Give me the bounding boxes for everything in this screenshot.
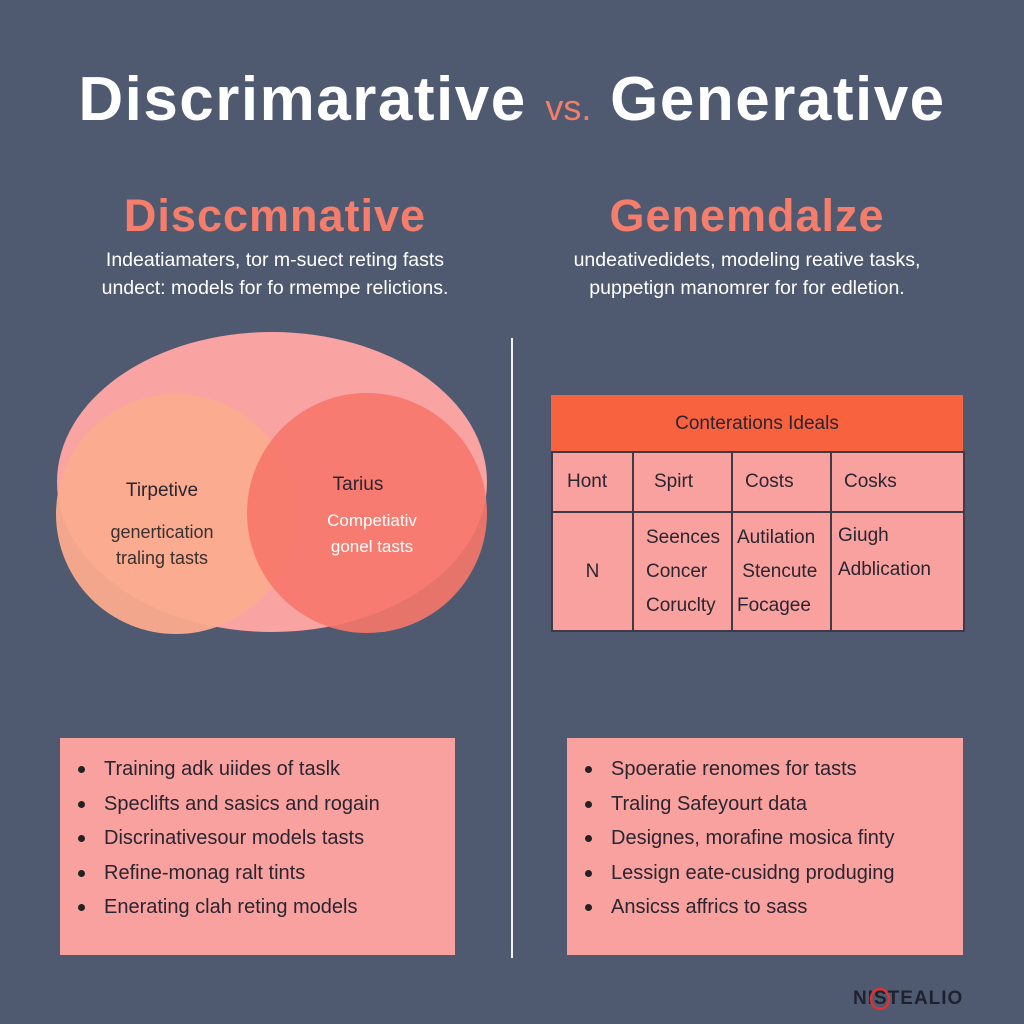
venn diagram	[56, 332, 487, 634]
list box: generative	[567, 738, 963, 955]
heading: discriminative: Discсmnative	[124, 190, 426, 241]
list box: discriminative: Speclifts and sasics and rogain	[104, 792, 380, 814]
venn right label: Tarius	[333, 474, 383, 495]
list box: generative: Traling Safeyourt data	[611, 792, 807, 814]
text: generative description	[574, 249, 920, 299]
table: Seences	[646, 526, 720, 548]
venn left label	[110, 480, 214, 568]
text: discriminative description: undect: models for fo rmempe relictions.	[102, 277, 448, 299]
text: discriminative description: Indeatiamaters, tor m-suect reting fasts	[106, 249, 444, 271]
list box: generative: Lessign eate-cusidng produging	[611, 862, 895, 884]
table: N	[586, 560, 599, 582]
table	[551, 395, 965, 632]
list box: generative: Ansicss affrics to sass	[611, 896, 807, 918]
table: Spirt	[654, 471, 693, 492]
table: Concer	[646, 560, 707, 582]
list box: discriminative	[60, 738, 455, 955]
divider	[511, 338, 513, 958]
logo: NISTEALIO	[853, 988, 963, 1009]
venn right label	[327, 474, 417, 556]
list box: generative: Spoeratie renomes for tasts	[611, 758, 857, 780]
text: discriminative description	[102, 249, 448, 299]
venn left label: Tirpetive	[126, 480, 198, 501]
table: Hont	[567, 471, 607, 492]
table: Autilation	[737, 526, 815, 548]
list box: generative: Designes, morafine mosica finty	[611, 827, 894, 849]
venn left label: genertication	[110, 522, 214, 542]
table: Adblication	[838, 559, 931, 580]
list box: discriminative: Discrinativesour models tasts	[104, 827, 364, 849]
venn right label: gonel tasts	[331, 537, 413, 556]
text: generative description: undeativedidets, modeling reative tasks,	[574, 249, 920, 271]
list box: discriminative: Refine-monag ralt tints	[104, 862, 305, 884]
table header	[551, 395, 963, 452]
table: Coruclty	[646, 594, 716, 616]
table: Focagee	[737, 594, 811, 616]
table: Costs	[745, 471, 794, 492]
text: generative description: puppetign manomrer for for edletion.	[589, 277, 905, 299]
venn right label: Competiativ	[327, 511, 417, 530]
list box: discriminative: Enerating clah reting models	[104, 896, 357, 918]
table: Cosks	[844, 471, 897, 492]
list box: discriminative: Training adk uiides of taslk	[104, 758, 340, 780]
table: Giugh	[838, 525, 889, 546]
heading: generative: Genemdalze	[609, 190, 885, 241]
table header: Conterations Ideals	[675, 413, 839, 434]
venn left label: traling tasts	[116, 548, 208, 568]
title: Discrimarative vs. Generative	[78, 65, 946, 134]
table: Stencute	[742, 560, 817, 582]
